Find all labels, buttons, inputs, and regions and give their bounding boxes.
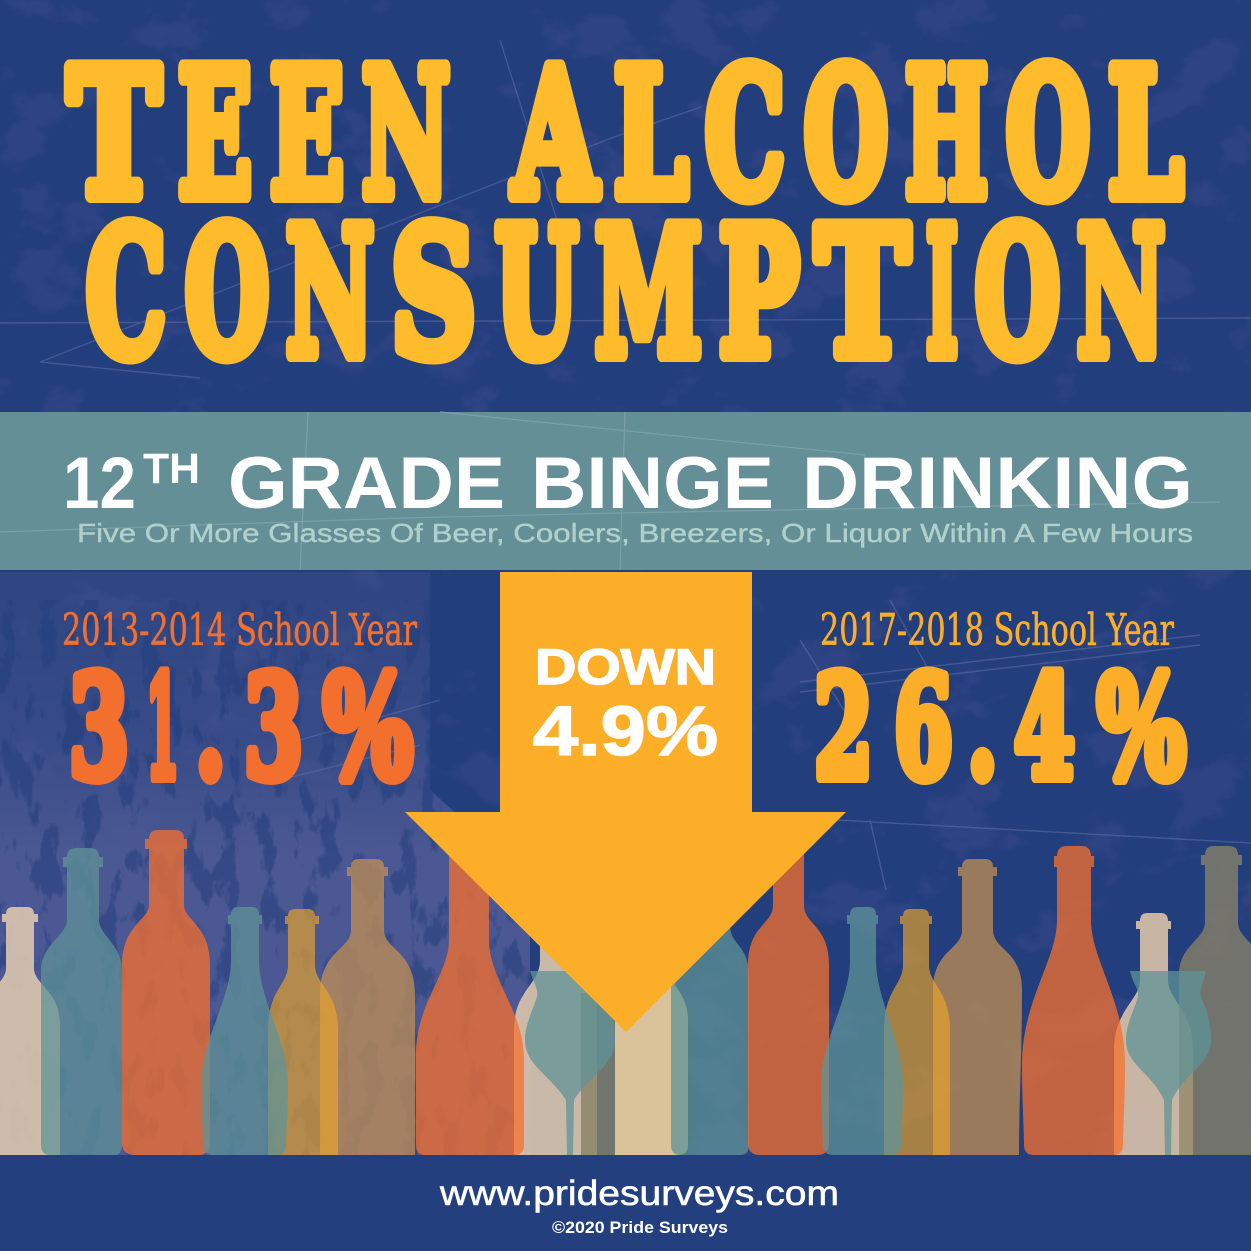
bottle: pale yellow center	[581, 880, 688, 1155]
value: 31.3%: 3	[244, 646, 303, 811]
title line 1: L	[1108, 32, 1183, 237]
wine glass 1	[525, 971, 615, 1155]
title line 1: C	[705, 32, 785, 237]
bottle: cream right	[1114, 913, 1193, 1155]
stat: 2013-2014	[62, 605, 418, 811]
value: 26.4%: .	[967, 646, 998, 811]
illustration: bottles and glasses	[0, 830, 1251, 1155]
value: 26.4%: %	[1097, 646, 1186, 811]
title line 2: N	[1077, 191, 1165, 396]
heading: 12th grade binge drinking	[63, 443, 1193, 524]
arrow: down 4.9%	[405, 572, 846, 1032]
value: 26.4%: 4	[1014, 646, 1075, 811]
value: 31.3%: 3	[69, 646, 129, 811]
website url: www.pridesurveys.com	[439, 1174, 839, 1213]
title line 1: L	[614, 32, 688, 237]
value: 31.3%	[69, 646, 413, 811]
title line 1: O	[804, 32, 888, 237]
title line 2: C	[86, 191, 166, 396]
value: 26.4%: 6	[894, 646, 953, 811]
arrow label: down: DOWN	[535, 639, 716, 695]
title line 2: O	[185, 191, 269, 396]
title line 2: O	[975, 191, 1060, 396]
bottle: grey	[1179, 846, 1251, 1155]
bottle: orange 3	[748, 850, 829, 1155]
value: 26.4%: 2	[814, 646, 873, 811]
title line 1: E	[178, 32, 252, 237]
stat: 2017-2018	[814, 605, 1186, 811]
title line 2: U	[495, 191, 578, 396]
subheading: definition of binge drinking: Five Or More Glasses Of Beer, Coolers, Breezers, Or Liquor Within A Few Hours	[77, 518, 1193, 548]
title line 2: P	[719, 191, 799, 396]
value: 31.3%: %	[323, 646, 413, 811]
title	[68, 32, 1183, 396]
title line 1: A	[512, 32, 598, 237]
value: 26.4%	[814, 646, 1186, 811]
heading: 12th grade binge drinking: GRADE	[228, 443, 505, 524]
bottle: cream left	[0, 907, 60, 1155]
value: 31.3%: .	[195, 646, 226, 811]
heading: 12th grade binge drinking: BINGE	[531, 443, 774, 524]
bottle: orange 4	[1022, 846, 1125, 1155]
title line 2: M	[595, 191, 702, 396]
title line 1: O	[1006, 32, 1090, 237]
copyright: ©2020 Pride Surveys	[552, 1219, 728, 1237]
bottle: teal 1	[41, 848, 122, 1155]
arrow label: 4.9%: 4.9%	[533, 692, 718, 770]
bottle: cream center	[514, 900, 606, 1155]
bottle: gold 1	[268, 909, 338, 1155]
bottle: orange 1	[122, 830, 210, 1155]
title line 2: T	[816, 191, 909, 396]
bottle: teal 4	[821, 907, 903, 1155]
bottle: orange 2	[416, 850, 524, 1155]
title line 1: T	[68, 32, 160, 237]
value: 31.3%: 1	[146, 646, 179, 811]
title line 1: E	[270, 32, 344, 237]
panel: subtitle band	[0, 412, 1251, 570]
title line 1: H	[905, 32, 988, 237]
title line 2: N	[286, 191, 374, 396]
bottle: teal 2	[201, 907, 288, 1155]
bottle overlap shading	[581, 993, 615, 1155]
bottle: brown 1	[320, 859, 415, 1155]
title line 2: S	[391, 191, 476, 396]
title line 2: I	[926, 191, 958, 396]
title line 1: N	[362, 32, 450, 237]
bottle: brown 2	[933, 859, 1022, 1155]
wine glass 2	[1126, 971, 1211, 1155]
heading: 12th grade binge drinking: TH	[143, 445, 200, 493]
heading: 12th grade binge drinking: DRINKING	[802, 443, 1193, 524]
bottle: gold 2	[884, 909, 950, 1155]
title line 2	[86, 191, 1165, 396]
bottle: teal 3	[671, 880, 749, 1155]
title line 1	[68, 32, 1183, 237]
label: 2013-2014 school year: 2013-2014 School Year	[62, 605, 418, 656]
footer	[0, 1155, 1251, 1251]
heading: 12th grade binge drinking: 12	[63, 443, 136, 524]
